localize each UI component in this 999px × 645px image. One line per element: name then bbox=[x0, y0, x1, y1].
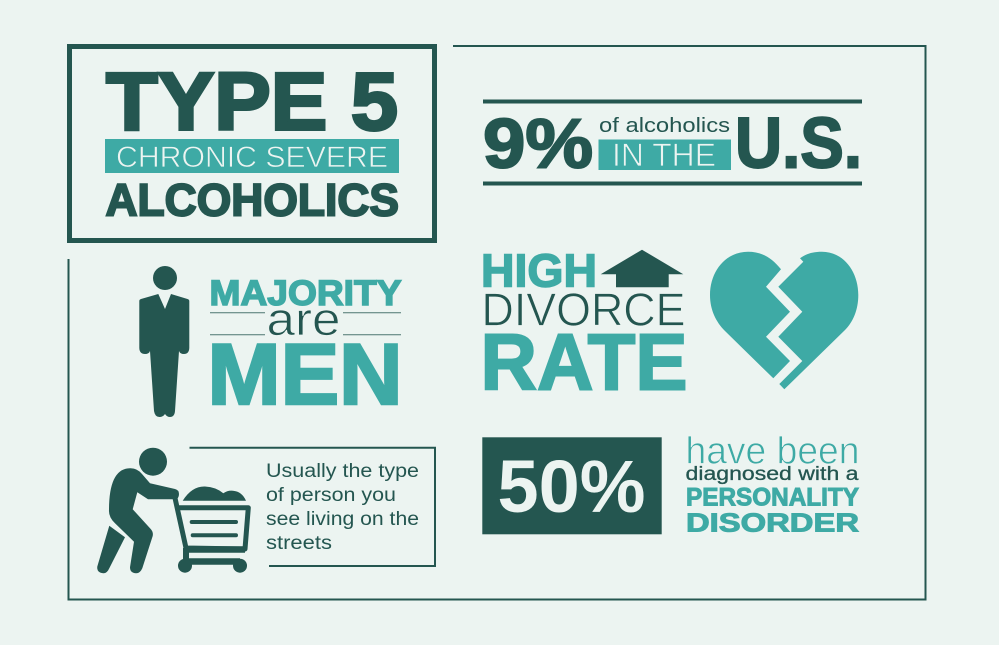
text box: usually the type of person bbox=[190, 448, 435, 566]
icon: person pushing cart bbox=[97, 448, 248, 573]
icon: man in suit bbox=[139, 266, 189, 417]
panel: living on the streets bbox=[97, 448, 435, 573]
text: diagnosed with a: diagnosed with a bbox=[686, 464, 859, 485]
text box: usually the type of person: see living on the bbox=[266, 509, 419, 530]
stat: 9%: 9% bbox=[483, 104, 593, 182]
icon: broken heart bbox=[710, 252, 858, 389]
text: have been: have been bbox=[686, 430, 860, 472]
text: high: HIGH bbox=[481, 244, 597, 296]
text: rate: RATE bbox=[480, 318, 688, 406]
text: of alcoholics: of alcoholics bbox=[599, 115, 730, 137]
text: personality: PERSONALITY bbox=[686, 484, 859, 512]
outer frame bbox=[68, 46, 926, 600]
stat box: 50%: 50% bbox=[498, 445, 646, 528]
panel: majority are men bbox=[139, 266, 403, 423]
icon: up arrow bbox=[601, 250, 683, 287]
heading: alcoholics: ALCOHOLICS bbox=[106, 174, 399, 226]
heading: type 5: TYPE 5 bbox=[106, 56, 398, 148]
band: in the: IN THE bbox=[612, 137, 716, 173]
text: are: are bbox=[266, 293, 340, 345]
text box: usually the type of person: streets bbox=[266, 533, 332, 554]
text: disorder: DISORDER bbox=[686, 508, 859, 538]
panel: high divorce rate bbox=[480, 244, 858, 406]
text box: usually the type of person: of person you bbox=[266, 485, 396, 506]
panel: title bbox=[70, 46, 434, 240]
text: men: MEN bbox=[208, 327, 402, 423]
subheading band: CHRONIC SEVERE bbox=[116, 141, 388, 174]
text: divorce: DIVORCE bbox=[482, 284, 686, 336]
panel: 9 percent in the U.S. bbox=[483, 100, 862, 186]
text box: usually the type of person: Usually the type bbox=[266, 461, 419, 482]
text: U.S.: U.S. bbox=[735, 104, 862, 184]
text: majority: MAJORITY bbox=[210, 274, 402, 313]
panel: 50 percent personality disorder bbox=[482, 430, 860, 538]
